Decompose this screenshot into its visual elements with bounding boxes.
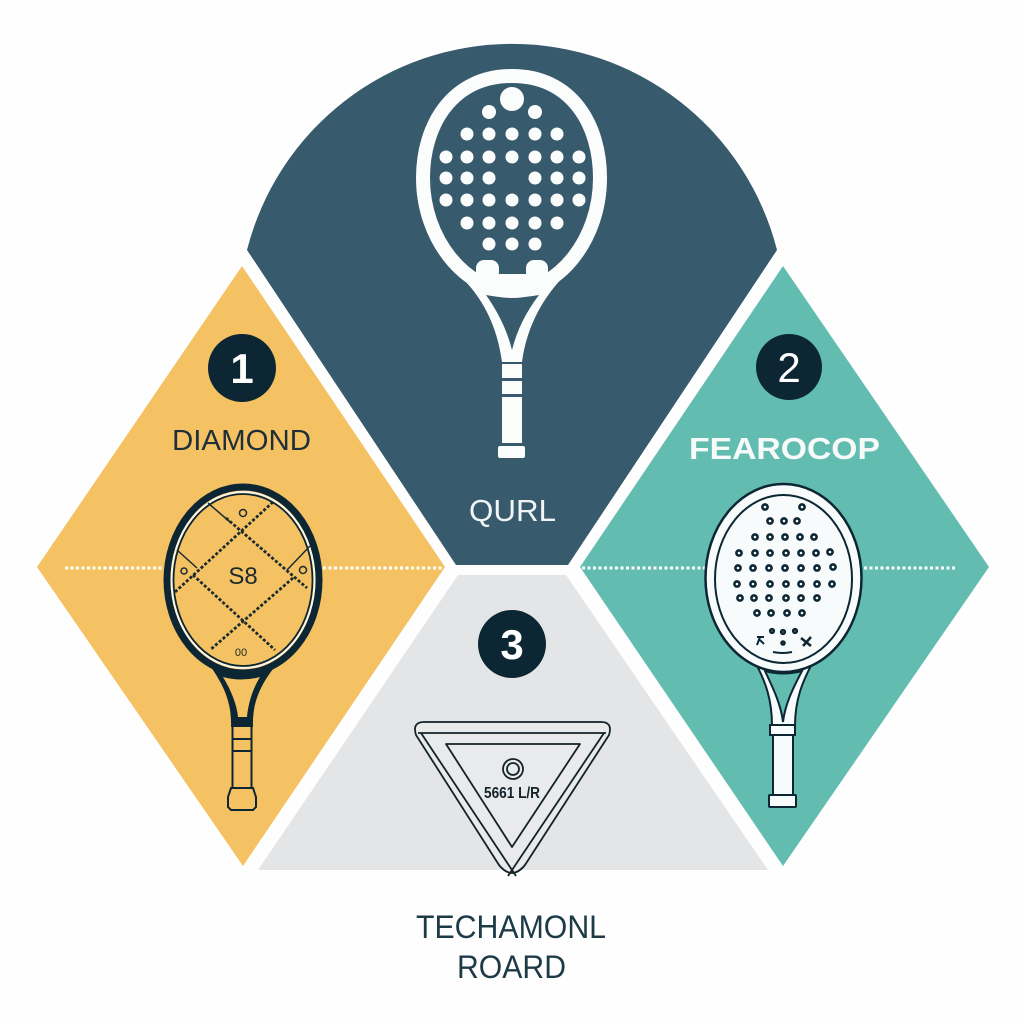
caption: TECHAMONL ROARD: TECHAMONL (416, 909, 606, 945)
racket code: 00: 00 (235, 647, 247, 659)
badge: number 3 (478, 610, 546, 678)
label: DIAMOND: DIAMOND (172, 425, 311, 457)
caption: TECHAMONL ROARD: ROARD (457, 949, 566, 985)
racket code: 5661 L/R: 5661 L/R (484, 785, 540, 802)
icon: white padel racket (423, 76, 600, 458)
panel: top round shape (247, 44, 777, 565)
caption: TECHAMONL ROARD (416, 909, 606, 985)
racket handle (769, 725, 796, 807)
badge: number 1: 1 (230, 345, 254, 392)
icon: diamond pattern racket (167, 487, 319, 810)
panel: bottom trapezoid (258, 575, 768, 876)
label: FEAROCOP: FEAROCOP (689, 431, 880, 466)
badge: number 2: 2 (777, 344, 801, 391)
icon: triangular racket frame (415, 722, 610, 876)
panel: left diamond (37, 266, 445, 866)
badge: number 2 (756, 334, 822, 400)
dotted axis line (65, 566, 442, 570)
racket handle (228, 726, 256, 810)
label: QURL: QURL (469, 493, 556, 528)
panel: right diamond (580, 266, 989, 866)
badge: number 3: 3 (500, 621, 524, 668)
dotted axis line (582, 566, 955, 570)
badge: number 1 (208, 334, 276, 402)
icon: dotted white racket (706, 484, 862, 807)
racket code: S8: S8 (228, 563, 258, 590)
